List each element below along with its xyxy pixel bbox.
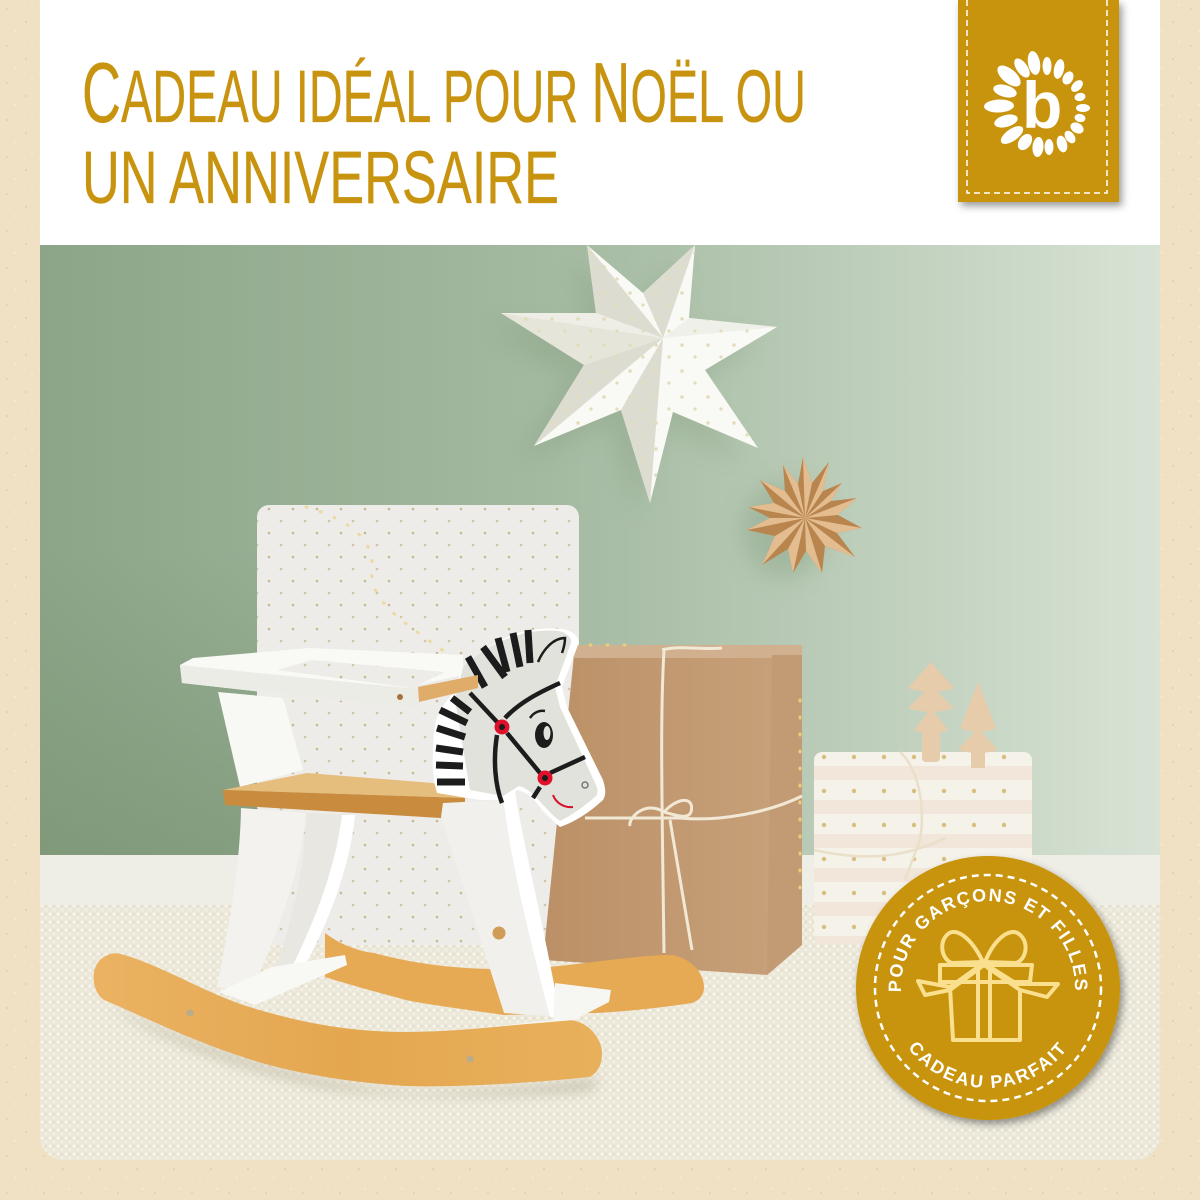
icon: sunflower logo: b [1022, 68, 1062, 142]
back post [218, 692, 303, 787]
logo tag [958, 0, 1119, 202]
handle [418, 675, 478, 702]
crossbar [219, 955, 347, 1005]
back rocker [325, 933, 704, 1015]
kraft star ornament [743, 457, 862, 578]
title: UN ANNIVERSAIRE [82, 136, 559, 219]
photo scene [40, 245, 1160, 1161]
back legs [217, 808, 355, 992]
striped small gift [814, 752, 1032, 944]
icon: sunflower logo [984, 50, 1090, 157]
seat [223, 773, 465, 818]
rocking horse [94, 628, 704, 1096]
horse head [433, 628, 605, 827]
paper star [487, 245, 777, 517]
white dotted gift [257, 505, 579, 945]
baseboard [40, 855, 1160, 907]
twine [585, 648, 802, 953]
front crossbar [480, 983, 611, 1028]
front rocker [94, 953, 602, 1086]
tray [180, 648, 463, 708]
carpet [40, 905, 1160, 1161]
rocker floor shadow [110, 1005, 600, 1096]
kraft gift [543, 645, 802, 975]
curved badge text: top: POUR GARÇONS ET FILLES [888, 888, 1088, 992]
wooden trees [908, 662, 998, 768]
wall [40, 245, 1160, 857]
curved badge text: bottom: CADEAU PARFAIT [910, 1042, 1064, 1088]
badge: gift for boys and girls [854, 855, 1128, 1129]
front leg [441, 790, 560, 1017]
icon: gift box [918, 932, 1058, 1040]
fairy lights [590, 645, 800, 900]
title: CADEAU IDÉAL POUR NOËL OU [82, 46, 907, 141]
header panel [40, 0, 1160, 246]
